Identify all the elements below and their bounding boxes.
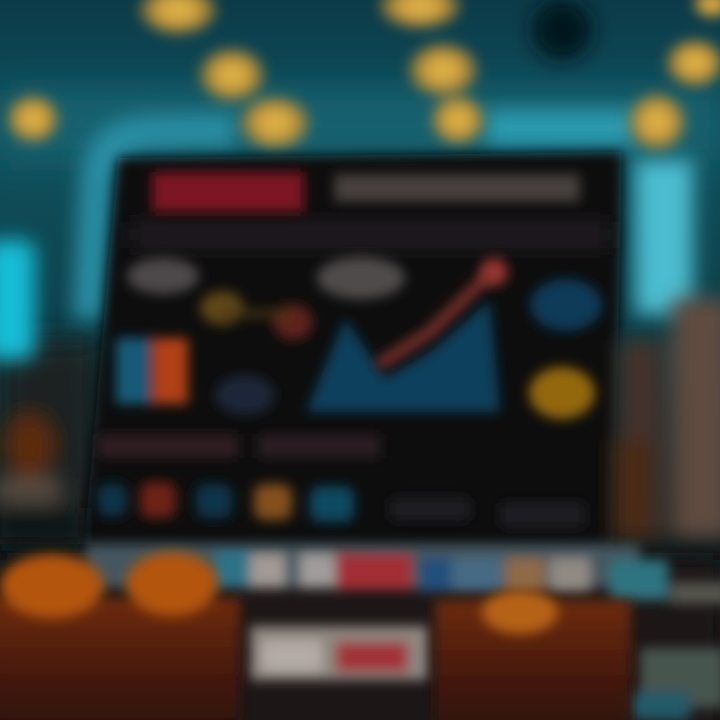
- heading: title text: [334, 174, 580, 202]
- text block: middle cloud label: [317, 257, 405, 299]
- row of icons: [98, 482, 585, 528]
- neon pipes: [72, 110, 693, 320]
- chart: blue area with red line: [306, 258, 508, 412]
- strip of coloured labels: [85, 544, 720, 604]
- icon: blue cloud: [530, 279, 602, 331]
- right lower block: [630, 648, 720, 720]
- icon: orange dome middle: [126, 552, 218, 616]
- right brown column: [612, 298, 720, 540]
- black ceiling fixture: [532, 0, 592, 60]
- icon: orange dome left: [0, 554, 104, 618]
- panel: white and red sign: [250, 626, 428, 680]
- chart: connected dots: [200, 291, 313, 340]
- icon: left cyan glow: [0, 240, 35, 360]
- panel: dark screen: [84, 152, 622, 548]
- ceiling lights: [6, 0, 720, 152]
- right orange crate: [435, 590, 631, 720]
- left orange crate: [0, 554, 240, 720]
- text block: left cloud label: [127, 258, 199, 294]
- left lamp: [0, 411, 85, 544]
- text block: lower labels: [98, 434, 380, 458]
- icon: orange dome right: [482, 590, 558, 634]
- bar chart: blue and orange bars: [116, 338, 188, 404]
- heading: red banner: [152, 172, 304, 212]
- lower floor band: [0, 560, 720, 720]
- text block: small label under bars: [215, 375, 275, 415]
- icon: yellow cloud: [529, 367, 595, 419]
